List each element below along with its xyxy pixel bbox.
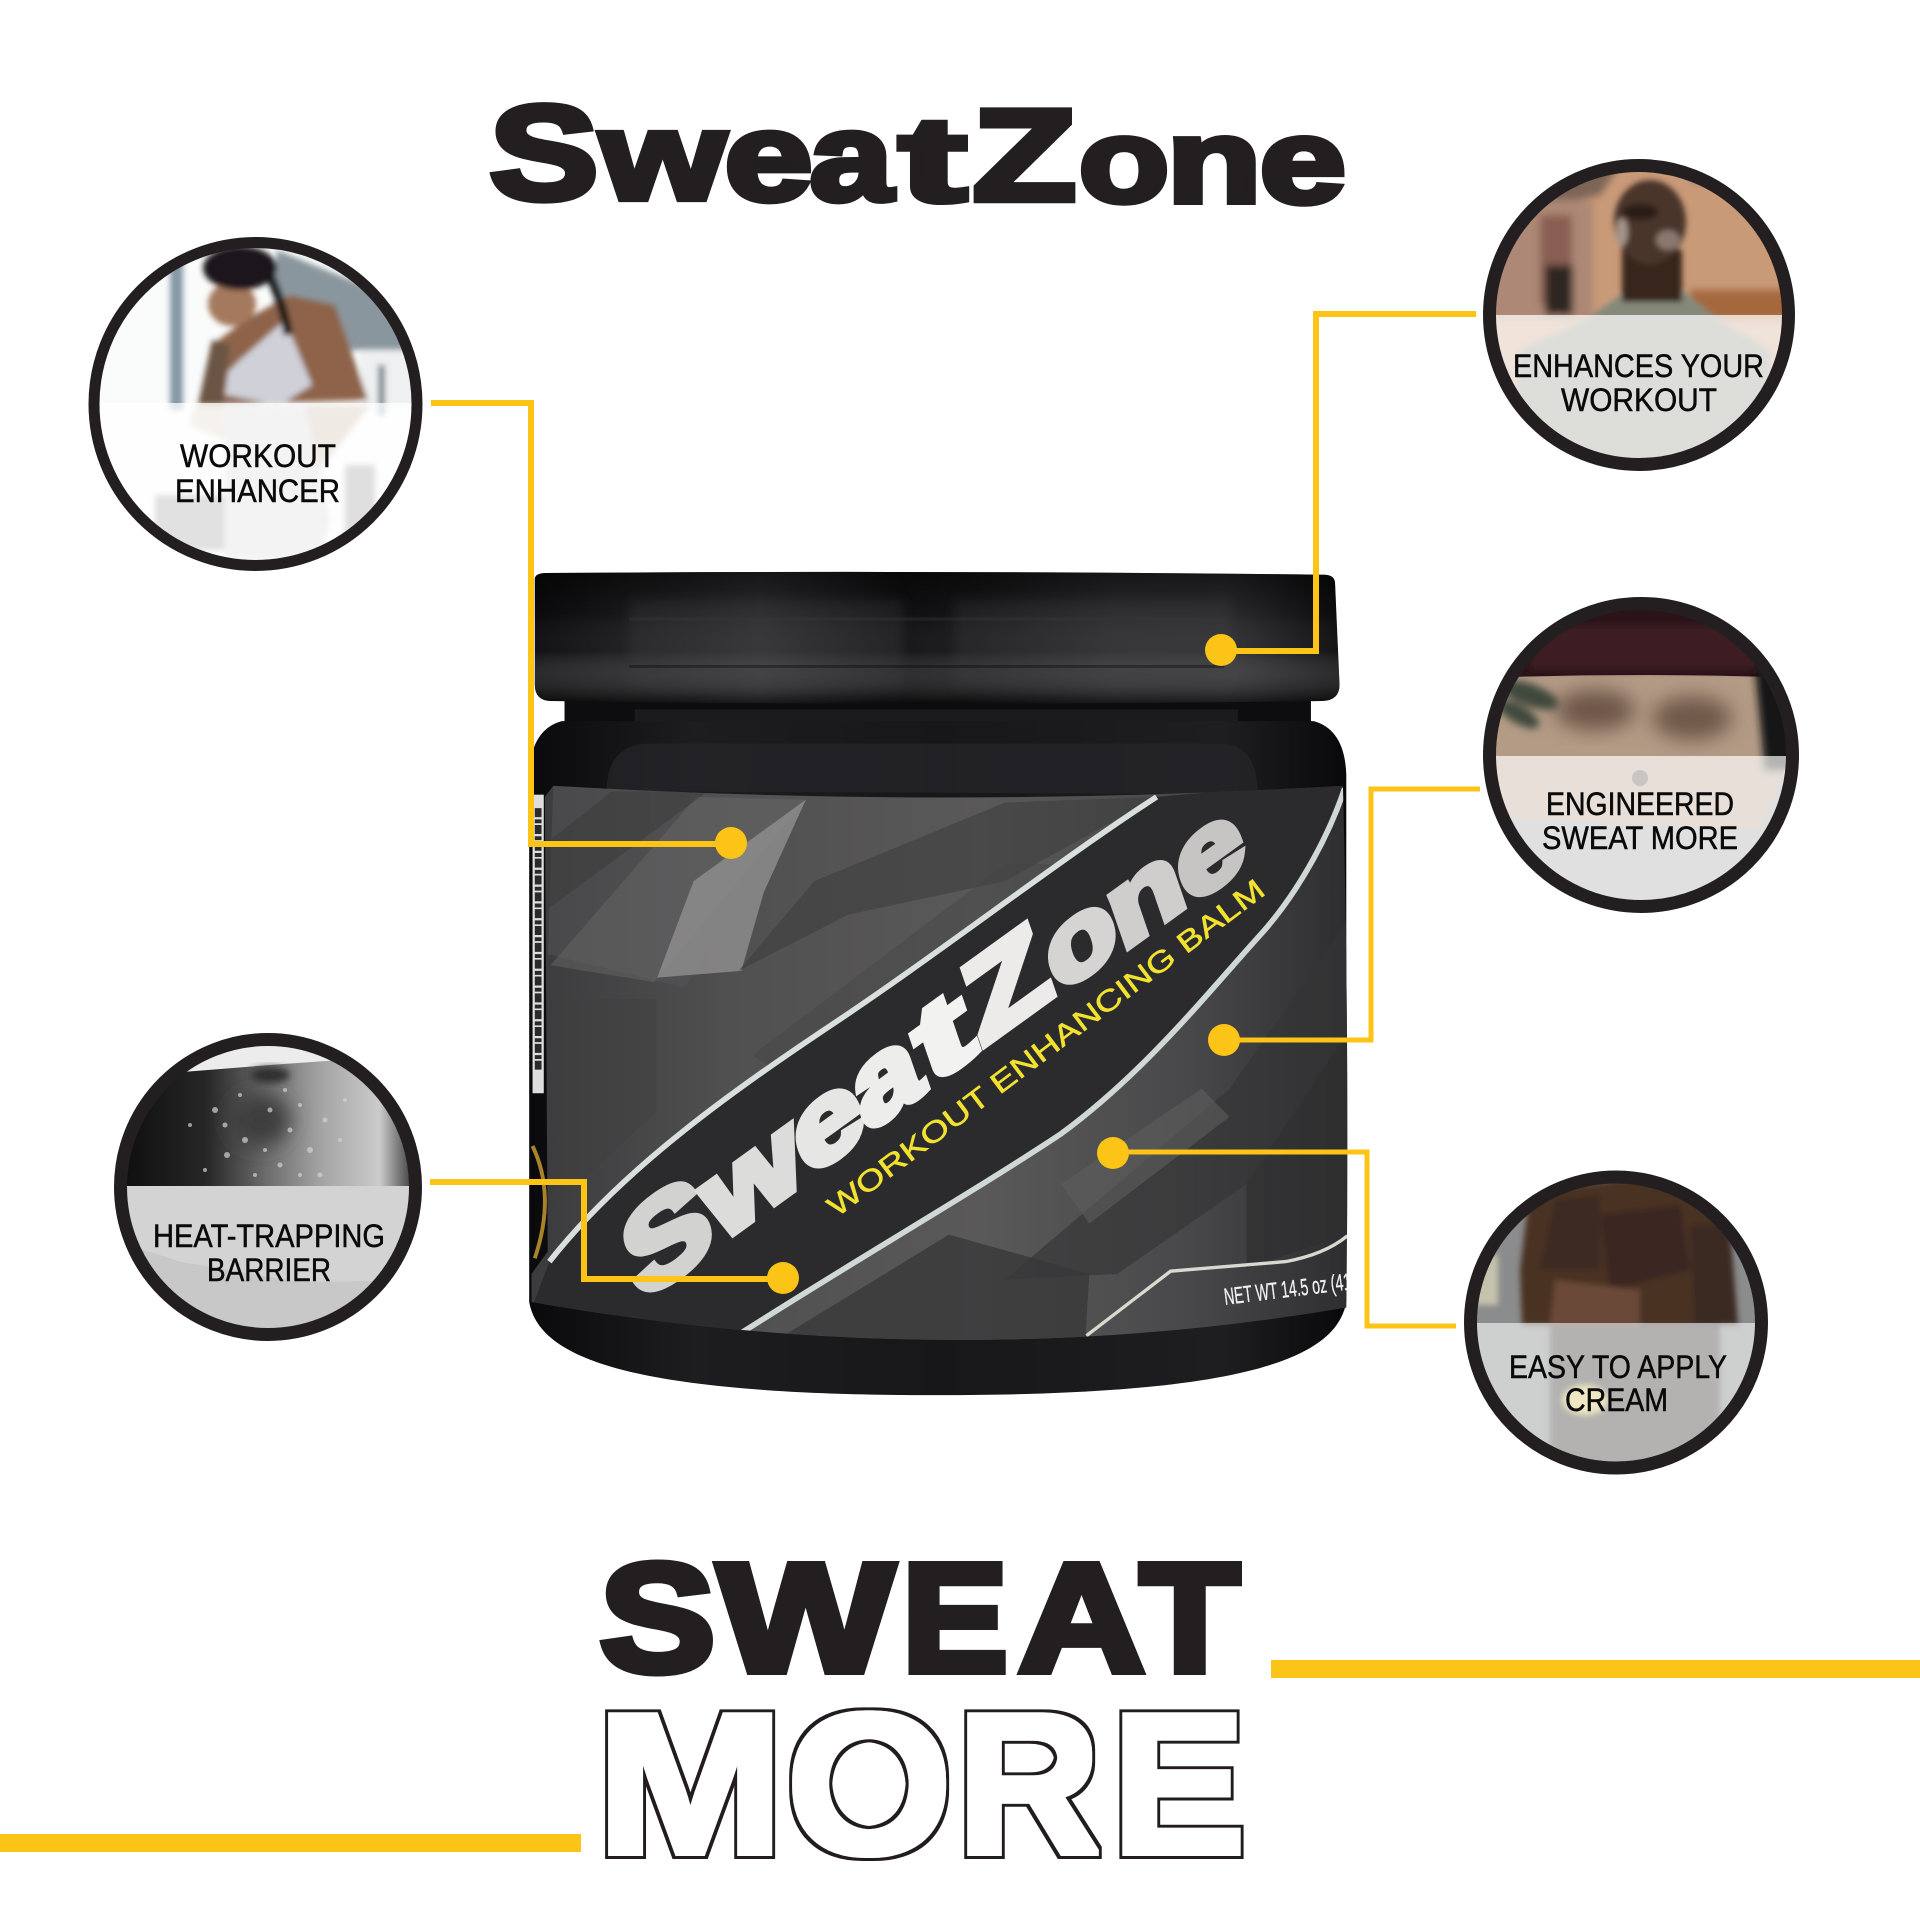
waistband [1512,768,1786,900]
label chevrons, upper left [548,786,1157,1212]
heading: MORE outlined: O [786,1672,952,1896]
side panel with small print [533,795,544,1093]
label chevrons, lower right [747,920,1347,1369]
heading: SWEAT [600,1531,1240,1704]
callout: engineered sweat more [1483,597,1800,920]
caption: WORKOUT [180,438,336,474]
photo: man applying cream [1477,1184,1755,1462]
caption: BARRIER [207,1252,331,1288]
connector: enhances your workout to lid [1221,314,1476,651]
label logo: Z [949,898,1063,1069]
connector: heat-trapping barrier to jar [430,1182,783,1279]
title: SweatZone logo [490,78,1346,229]
label logo [623,820,1246,1292]
heading: SWEAT: S [600,1532,715,1704]
title: SweatZone logo: e [725,88,812,227]
ring [1490,166,1788,464]
photo: man in gym [1496,172,1782,458]
label logo: e [1158,774,1257,928]
heading: MORE outlined: M [596,1673,784,1896]
label [532,786,1348,1340]
caption: ENGINEERED [1546,786,1734,822]
caption: CREAM [1565,1382,1668,1418]
jar neck [565,697,1311,726]
caption: SWEAT MORE [1542,820,1738,856]
heading: MORE outlined [596,1672,1245,1896]
label logo: e [776,1042,877,1200]
ring [120,1040,416,1334]
caption: ENHANCER [175,473,340,509]
label logo: a [836,998,935,1155]
accent bar right [1271,1660,1920,1678]
label logo: w [686,1087,816,1266]
translucent band [127,1186,409,1328]
label logo: t [900,963,985,1107]
navel piercing [1632,770,1648,786]
jar lid [535,572,1340,703]
callout: heat-trapping barrier [113,1034,423,1346]
heading: SWEAT: E [902,1532,1008,1704]
connector: easy to apply to jar [1113,1152,1456,1326]
photo: sweaty abdomen [1496,610,1786,900]
caption: HEAT-TRAPPING [153,1218,385,1254]
title: SweatZone logo: Z [973,83,1076,228]
lower panel [113,1186,423,1282]
lower white line [741,789,1345,1333]
title: SweatZone logo: a [810,88,894,227]
translucent band [1496,315,1782,458]
title: SweatZone logo: e [1260,95,1346,229]
tattoo [1501,677,1562,734]
dark diagonal band [522,780,1347,1333]
jar shoulder highlight [607,744,1258,794]
title: SweatZone logo: n [1167,95,1261,228]
accent bar left [0,1834,581,1852]
translucent band [1496,756,1786,900]
heading: SWEAT: T [1140,1531,1240,1704]
heading: SWEAT: A [1018,1532,1145,1704]
connector: workout enhancer to jar [431,403,731,844]
ring [94,242,417,566]
title: SweatZone logo: t [899,93,967,227]
heading: MORE outlined: R [957,1673,1100,1896]
droplets [188,1088,347,1178]
ring [1470,1177,1762,1468]
callout: enhances your workout [1483,159,1800,480]
jar body [529,721,1346,1395]
emblem on side [533,1146,545,1258]
connector: engineered sweat more to jar [1224,789,1480,1040]
translucent band [150,403,412,560]
caption: EASY TO APPLY [1509,1349,1727,1385]
photo: water droplets on skin [127,1046,409,1328]
net weight: NET WT 14.5 oz (411g) [1223,1266,1372,1310]
caption: WORKOUT [1561,382,1717,418]
title: SweatZone logo: w [599,86,726,226]
label logo: n [1092,816,1196,973]
product jar [522,572,1372,1395]
callout: workout enhancer [88,237,428,578]
label logo: o [1028,861,1130,1015]
title: SweatZone logo: o [1079,96,1169,227]
title: SweatZone logo: S [490,78,598,228]
ring [1490,604,1792,906]
caption: ENHANCES YOUR [1513,348,1764,384]
marker dots [715,634,1240,1294]
callout: easy to apply cream [1464,1171,1768,1478]
heading: MORE outlined: E [1112,1673,1245,1896]
corner line [1086,1236,1347,1336]
photo: woman applying balm [153,248,412,558]
translucent band [1477,1323,1755,1462]
heading: SWEAT: W [718,1532,894,1704]
label logo: S [607,1147,726,1326]
label subtitle: WORKOUT ENHANCING BALM [822,874,1271,1223]
upper white line [549,797,1157,1262]
